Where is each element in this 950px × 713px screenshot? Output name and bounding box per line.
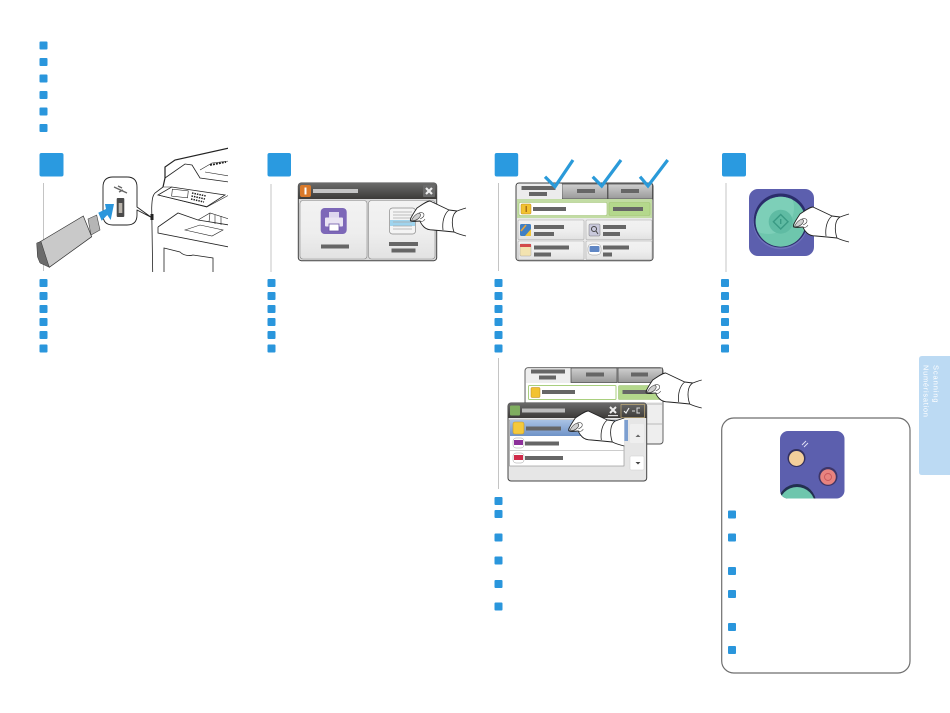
touch screen front list dialog <box>508 403 647 481</box>
side tab text <box>922 365 940 418</box>
panel: step 2 choose scan <box>268 153 466 352</box>
icon: control buttons <box>780 431 844 498</box>
step 3 number badge <box>495 153 518 176</box>
step 2 bullets <box>268 279 276 352</box>
panel: step 1 insert USB drive <box>37 148 229 352</box>
icon: pointing hand <box>793 207 849 242</box>
illustration: USB callout <box>103 177 154 225</box>
touch screen with tabs <box>516 183 653 261</box>
step 4 number badge <box>722 153 746 176</box>
touch screen back layer <box>525 368 663 444</box>
side tab text: Scanning <box>932 365 940 403</box>
icon: pointing hand on list <box>569 411 624 446</box>
icon: check marks <box>545 160 668 187</box>
step 3 bullets <box>494 279 502 352</box>
icon: pointing hand on back layer <box>646 373 702 408</box>
panel: step 4 press start <box>721 153 849 352</box>
icon: pointing hand <box>410 201 466 236</box>
step 1 number badge <box>40 153 64 176</box>
illustration: printer <box>152 148 229 273</box>
step 4 bullets <box>721 279 729 352</box>
side tab: section label <box>919 356 950 475</box>
step 3 lower bullets <box>494 497 502 610</box>
top bullet list <box>40 42 48 132</box>
note bullets <box>728 510 736 654</box>
panel: step 3 select options <box>494 153 702 610</box>
icon: start button <box>749 189 814 256</box>
arrow: insert direction <box>98 204 114 221</box>
icon: USB drive <box>37 215 100 267</box>
step 1 bullets <box>40 279 48 352</box>
panel: clear and stop note box <box>722 418 910 673</box>
icon: print <box>321 208 347 234</box>
touch screen dialog <box>298 183 437 261</box>
step 2 number badge <box>268 153 291 176</box>
icon: scan <box>390 208 416 234</box>
side tab text: Numérisation <box>922 365 930 418</box>
